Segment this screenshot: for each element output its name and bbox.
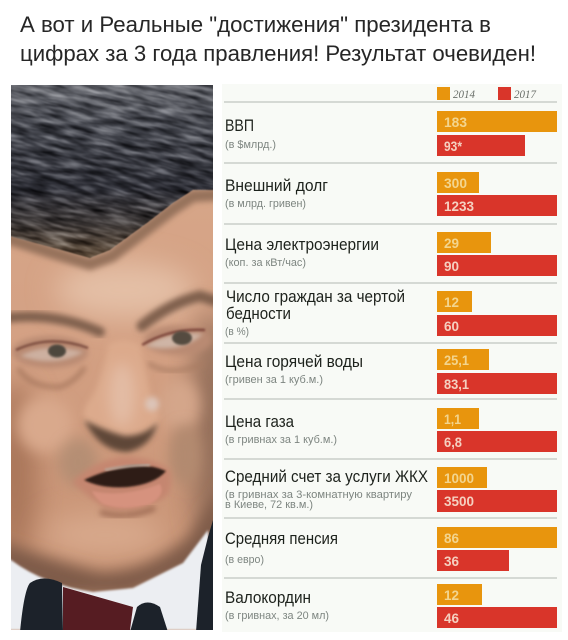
row: Средний счет за услуги ЖКХ: 1000 xyxy=(444,470,474,486)
row: Цена электроэнергии xyxy=(225,232,557,276)
row: Валокордин: (в гривнах, за 20 мл) xyxy=(225,610,329,622)
row: Средняя пенсия: 86 xyxy=(444,530,459,546)
row: Число граждан за чертой бедности: Число граждан за чертой xyxy=(226,288,405,306)
row: Средний счет за услуги ЖКХ xyxy=(225,467,557,512)
row: Цена горячей воды: (гривен за 1 куб.м.) xyxy=(225,374,323,386)
row: ВВП xyxy=(225,111,557,156)
row: Цена газа: 1,1 xyxy=(444,411,461,427)
legend: 2014 xyxy=(453,89,475,101)
row: ВВП: 183 xyxy=(444,114,467,130)
row: Валокордин xyxy=(225,584,557,628)
title: цифрах за 3 года правления! Результат очевиден! xyxy=(20,41,536,66)
row: Число граждан за чертой бедности: 60 xyxy=(444,318,459,334)
row: Средняя пенсия: (в евро) xyxy=(225,554,264,566)
row: Цена горячей воды xyxy=(225,349,557,394)
row: ВВП: (в $млрд.) xyxy=(225,139,276,151)
tie xyxy=(63,587,133,630)
row: Внешний долг: 300 xyxy=(444,175,467,191)
row: Число граждан за чертой бедности xyxy=(225,288,557,338)
title xyxy=(20,12,536,66)
row: Цена электроэнергии: (коп. за кВт/час) xyxy=(225,257,306,269)
chart panel xyxy=(222,84,562,632)
row: Цена горячей воды: 25,1 xyxy=(444,352,469,368)
row: Цена горячей воды: 83,1 xyxy=(444,376,469,392)
row: Средняя пенсия xyxy=(225,527,557,571)
row: Внешний долг: 1233 xyxy=(444,198,474,214)
row: Внешний долг: (в млрд. гривен) xyxy=(225,198,306,210)
row: ВВП: ВВП xyxy=(225,117,254,135)
row: Средний счет за услуги ЖКХ: Средний счет за услуги ЖКХ xyxy=(225,468,428,486)
row: Средний счет за услуги ЖКХ: в Киеве, 72 кв.м.) xyxy=(225,499,313,511)
jaw shadow xyxy=(11,493,213,593)
photo: portrait xyxy=(11,85,213,630)
row: Внешний долг: Внешний долг xyxy=(225,177,328,195)
row: Средняя пенсия: Средняя пенсия xyxy=(225,530,338,548)
hairline shadow xyxy=(0,194,230,264)
legend: 2017 xyxy=(514,89,537,101)
row: Средний счет за услуги ЖКХ: (в гривнах за 3-комнатную квартиру xyxy=(225,489,413,501)
legend xyxy=(437,87,537,101)
row: Цена газа xyxy=(225,408,557,452)
row: Валокордин: 46 xyxy=(444,610,459,626)
microphones and jacket xyxy=(20,520,213,630)
hair xyxy=(11,85,213,258)
row: Цена газа: Цена газа xyxy=(225,413,295,431)
row: Валокордин: Валокордин xyxy=(225,589,311,607)
row: Цена горячей воды: Цена горячей воды xyxy=(225,353,363,371)
title: А вот и Реальные "достижения" президента в xyxy=(20,12,491,37)
nose xyxy=(84,340,159,452)
row: ВВП: 93* xyxy=(444,138,462,154)
row: Средняя пенсия: 36 xyxy=(444,553,459,569)
row: Цена электроэнергии: 90 xyxy=(444,258,459,274)
row: Средний счет за услуги ЖКХ: 3500 xyxy=(444,493,474,509)
row: Число граждан за чертой бедности: (в %) xyxy=(225,326,249,338)
eyebrows xyxy=(5,296,225,332)
row: Цена электроэнергии: Цена электроэнергии xyxy=(225,236,379,254)
row: Число граждан за чертой бедности: 12 xyxy=(444,294,459,310)
row: Цена газа: 6,8 xyxy=(444,434,462,450)
shirt collar xyxy=(0,530,215,630)
row: Цена электроэнергии: 29 xyxy=(444,235,459,251)
row: Валокордин: 12 xyxy=(444,587,459,603)
eyes xyxy=(12,325,212,387)
mouth xyxy=(72,457,171,515)
row: Внешний долг xyxy=(225,172,557,216)
row: Число граждан за чертой бедности: бедности xyxy=(226,305,291,323)
row: Цена газа: (в гривнах за 1 куб.м.) xyxy=(225,434,337,446)
